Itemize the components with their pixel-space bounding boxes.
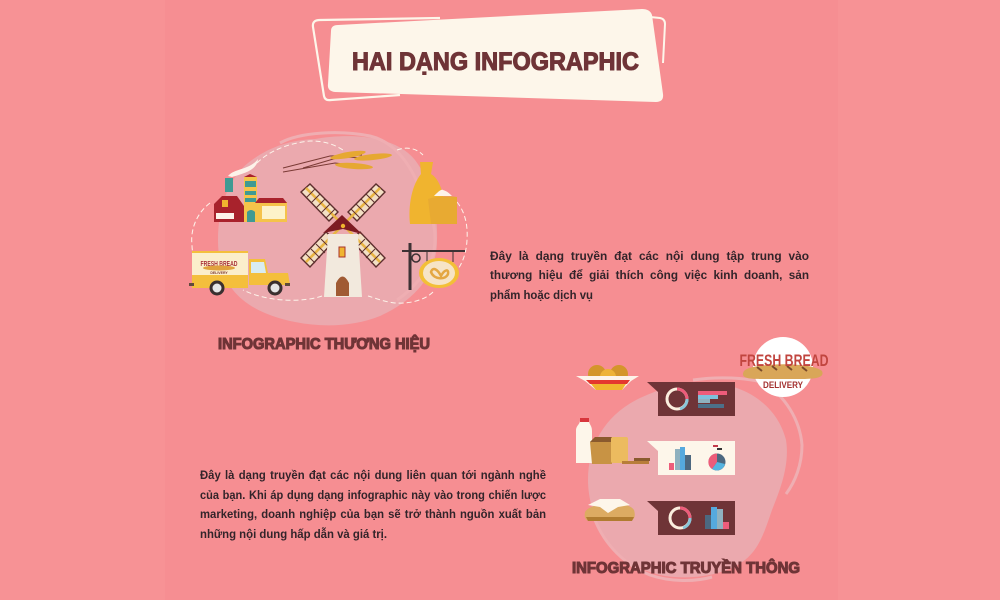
chart card: bars and pie [647, 441, 735, 475]
icon: milk and loaf [576, 418, 650, 464]
text block: media description: của bạn. Khi áp dụng dạng infographic này vào trong chiến lược [200, 490, 547, 502]
icon: long bun [585, 499, 635, 521]
dashed route [192, 141, 467, 303]
icon: delivery truck: DELIVERY [210, 271, 228, 275]
icon: flour sacks [409, 162, 457, 224]
icon: fresh bread badge: DELIVERY [763, 380, 803, 390]
heading: brand infographic: INFOGRAPHIC THƯƠNG HIỆU [218, 335, 430, 353]
icon: fresh bread badge [740, 337, 828, 397]
icon: delivery truck: FRESH BREAD [200, 261, 238, 268]
chart card: donut and columns [647, 501, 735, 535]
icon: pretzel sign [402, 243, 465, 290]
panel: brand infographic illustration [189, 133, 467, 325]
icon: factory [214, 159, 287, 222]
icon: windmill [301, 184, 385, 297]
icon: bread bowl [576, 365, 639, 390]
text block: brand description: phẩm hoặc dịch vụ [490, 290, 593, 302]
title text: HAI DẠNG INFOGRAPHIC [352, 48, 639, 76]
pale blob [218, 136, 437, 325]
text block: brand description: Đây là dạng truyền đạt các nội dung tập trung vào [490, 251, 809, 263]
text block: brand description: thương hiệu để giải thích công việc kinh doanh, sản [490, 270, 809, 282]
title banner [313, 9, 665, 102]
heading: media infographic: INFOGRAPHIC TRUYỀN THÔNG [572, 559, 800, 577]
text block: media description [200, 470, 547, 541]
chart card: donut and bars [647, 382, 735, 416]
icon: delivery truck [189, 251, 290, 296]
icon: fresh bread badge: FRESH BREAD [740, 351, 828, 370]
text block: media description: những nội dung hấp dẫn và giá trị. [200, 528, 387, 541]
icon: wheat [283, 149, 392, 172]
text block: brand description [490, 251, 809, 302]
pale blob [588, 383, 787, 577]
text block: media description: Đây là dạng truyền đạt các nội dung liên quan tới ngành nghề [200, 470, 546, 482]
text block: media description: marketing, doanh nghiệp của bạn sẽ trở thành nguồn xuất bản [200, 509, 546, 521]
panel: media infographic illustration [576, 337, 828, 581]
